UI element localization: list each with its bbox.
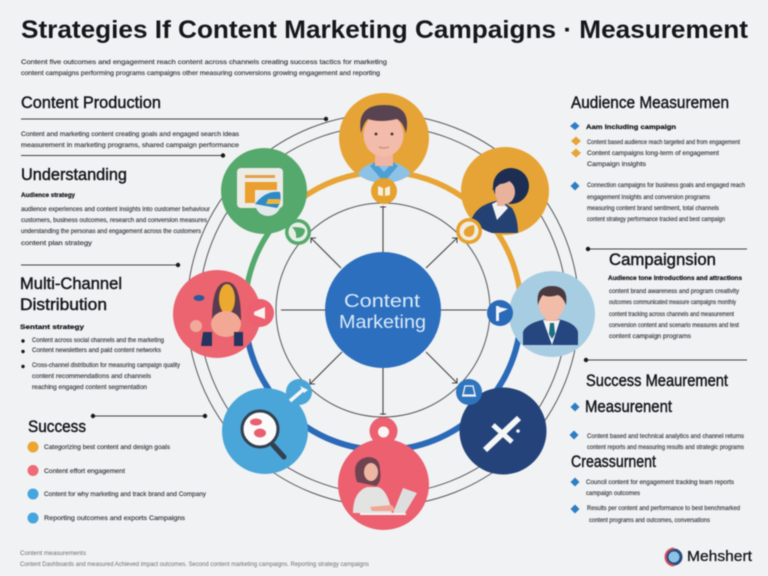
panel: audience measurement: measuring content brand sentiment, total channels [587,205,720,212]
heading: success: Success [28,417,86,436]
intro text: Content five outcomes and engagement reach content across channels creating success tactics for marketing [21,59,387,66]
title: Strategies If Content Marketing Campaigns · Measurement [21,16,749,44]
logo: Mehshert [687,548,753,565]
panel: multi-channel distribution: Cross-channel distribution for measuring campaign quality [32,362,181,369]
panel: success measurement [570,358,747,524]
panel: multi-channel distribution [20,274,181,391]
panel: campaign: outcomes communicated measure campaigns monthly [609,299,737,306]
panel: campaign: Audience tone introductions and attractions [608,275,742,282]
node: navy tools [460,388,546,474]
panel: success: Reporting outcomes and exports Campaigns [44,515,186,522]
small badge: top book [371,178,397,204]
panel: audience measurement: Content campaigns long-term of engagement [587,150,719,157]
panel: success measurement: Measurenent [585,397,672,416]
heading: creassurnent: Creassurnent [571,452,656,471]
panel: success: Content for why marketing and track brand and Company [44,491,207,498]
panel: success measurement: campaign outcomes [586,490,641,497]
panel: success measurement: content programs and outcomes, conversations [589,517,711,524]
panel: success measurement: Council content for engagement tracking team reports [586,479,735,486]
heading: audience measurement: Audience Measuremen [571,93,729,112]
footer text: Content Dashboards and measured Achieved impact outcomes. Second content marketing campaigns. Reporting strategy campaigns [20,561,370,568]
panel: audience measurement: Connection campaigns for business goals and engaged reach [587,182,745,189]
small badge: red ring [370,417,398,445]
panel: audience measurement [570,93,745,223]
intro text [21,59,387,77]
small badge: red megaphone [246,299,274,327]
center circle: content marketing: Content [344,291,420,311]
diagram: concentric rings [187,114,579,506]
panel: success measurement: Content based and technical analytics and channel returns [587,433,745,440]
heading: multi-channel distribution: Multi-Channel [20,274,122,293]
panel: success measurement: content reports and measuring results and strategic programs [587,444,745,451]
small badge: blue flag [487,300,513,326]
panel: success: Content effort engagement [44,468,125,475]
node: woman with laptop on red circle [338,439,429,530]
panel: campaign [586,247,747,340]
panel: understanding: understanding the personas and engagement across the customers [21,228,202,235]
panel: success: Categorizing best content and design goals [44,444,171,451]
small badge: orange drop [456,218,482,244]
panel: campaign: content campaign programs [609,333,692,340]
thick arc: green [245,212,285,312]
panel: content production [21,93,328,158]
panel: multi-channel distribution: content recommendations and channels [32,373,152,380]
heading: campaign: Campaignsion [609,250,716,269]
panel: understanding: audience experiences and content insights into customer behaviour [21,206,211,213]
thick arc: orange [285,172,521,312]
node: red left illustration [173,270,261,358]
small badge: laptop [456,379,482,405]
panel: audience measurement: content strategy performance tracked and best campaign [587,216,725,223]
panel: multi-channel distribution: reaching engaged content segmentation [32,384,147,391]
panel: content production: measurement in marketing programs, shared campaign performance [21,142,239,149]
panel: audience measurement: engagement insights and conversion programs [587,194,711,201]
panel: multi-channel distribution: Content across social channels and the marketing [32,337,164,344]
arrows from center [281,206,487,415]
footer text [20,550,370,568]
panel: campaign: conversion content and scenario measures and test [609,322,739,329]
intro text: content campaigns performing programs campaigns other measuring conversions growing engagement and reporting [21,70,380,77]
center circle: content marketing: Marketing [339,312,426,332]
heading: content production: Content Production [21,93,161,112]
panel: success measurement: Results per content and performance to best benchmarked [587,505,740,512]
panel: campaign: content brand awareness and program creativity [609,288,740,295]
panel: understanding: customers, business outcomes, research and conversion measures [21,217,208,224]
panel: audience measurement: Campaign insights [587,161,647,168]
thick arc: blue [245,312,521,450]
heading: multi-channel distribution: Distribution [20,295,107,314]
footer text: Content measurements [20,550,87,557]
node: man on light blue circle [509,271,595,357]
small badge: wrench [286,379,312,405]
panel: audience measurement: Content based audience reach targeted and from engagement [587,139,740,146]
panel: campaign: content tracking across channels and measurement [609,311,734,318]
heading: success measurement: Success Meaurement [586,371,728,390]
panel: multi-channel distribution: Content newsletters and paid content networks [32,347,162,354]
panel: success [28,414,207,524]
panel: understanding [21,165,211,267]
node: magnifier on blue circle [222,388,308,474]
panel: multi-channel distribution: Sentant strategy [20,324,84,331]
panel: understanding: content plan strategy [21,240,93,247]
heading: understanding: Understanding [21,165,127,184]
panel: audience measurement: Aam Including campaign [586,124,676,131]
node: green content card [221,148,307,234]
heading: multi-channel distribution [20,274,122,314]
center circle: content marketing [325,252,441,368]
node: woman on orange circle [461,147,549,235]
small badge: green leaf [285,219,311,245]
logo [666,548,753,566]
node: man on orange circle [339,93,429,183]
panel: understanding: Audience strategy [21,192,75,199]
panel: content production: Content and marketing content creating goals and engaged search ideas [21,131,240,138]
